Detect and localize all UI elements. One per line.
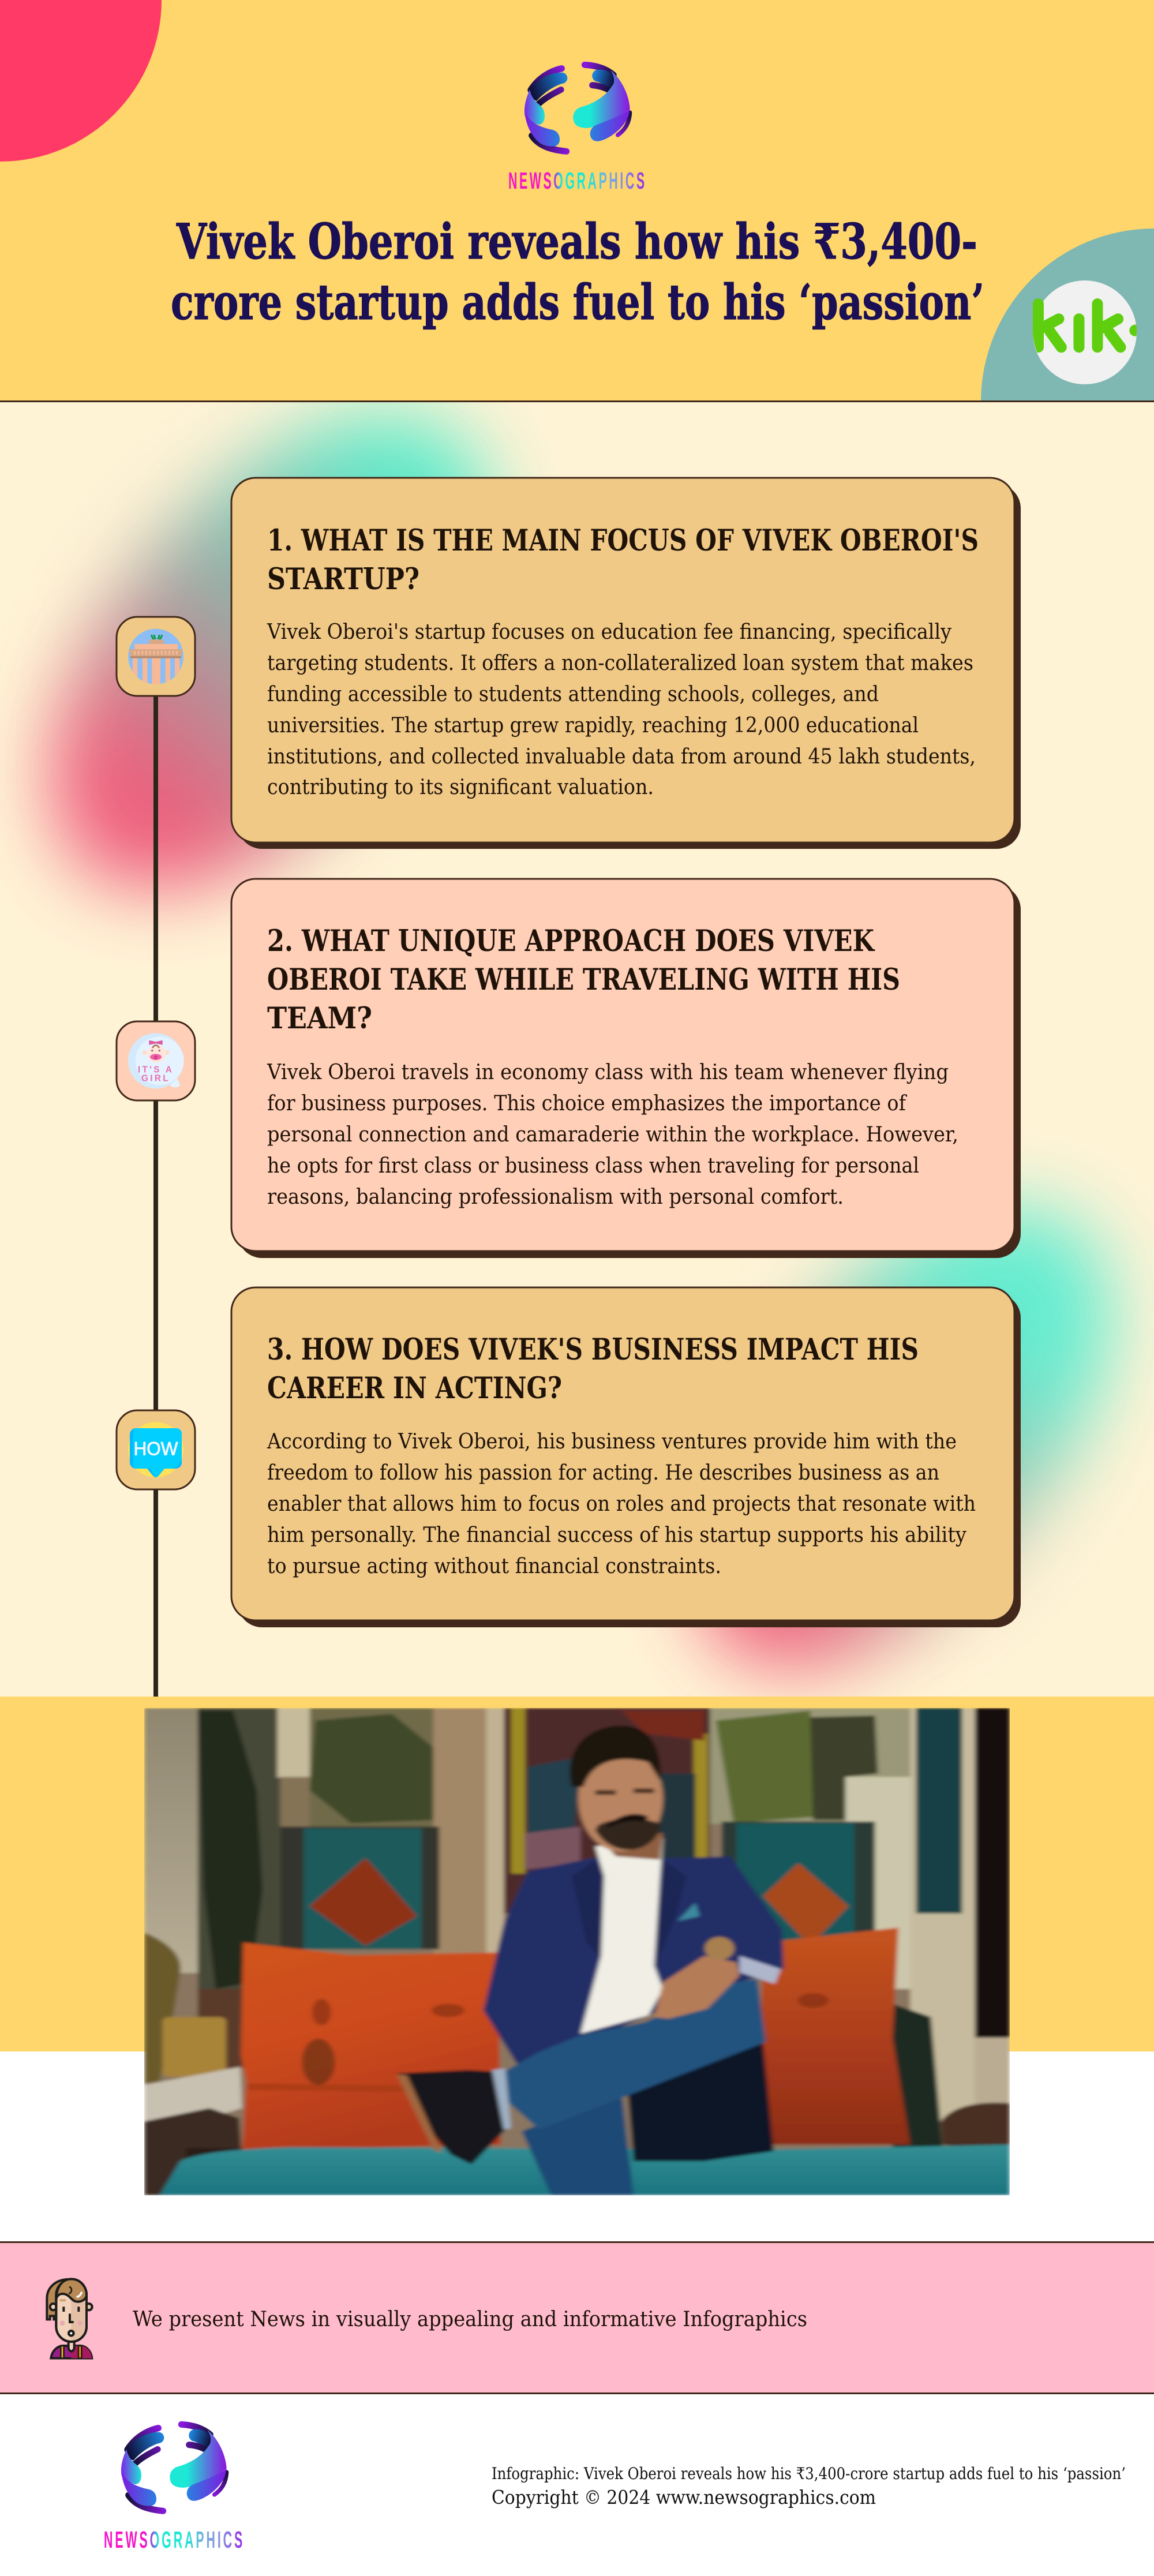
heading: question 1 xyxy=(267,523,979,597)
heading: question 2: TEAM? xyxy=(267,1001,372,1036)
decorative blurred blob: upper left xyxy=(0,336,574,968)
logo mark xyxy=(524,65,630,151)
icon: kik logo xyxy=(1033,280,1137,384)
sofa frame right xyxy=(893,2004,943,2148)
logo wordmark: NEWSOGRAPHICS xyxy=(508,167,645,194)
text: answer 2: personal connection and camaraderie within the workplace. However, xyxy=(267,1123,958,1147)
text: answer 1: institutions, and collected invaluable data from around 45 lakh students, xyxy=(267,745,976,769)
right chair xyxy=(722,1822,875,1944)
heading: question 3: CAREER IN ACTING? xyxy=(267,1371,562,1406)
header band xyxy=(0,0,1154,402)
text: footer credit: Copyright © 2024 www.newsographics.com xyxy=(492,2486,876,2508)
left side table with statue and basket xyxy=(198,1989,245,2068)
text: answer 3: to pursue acting without financial constraints. xyxy=(267,1555,721,1578)
heading: question 2 xyxy=(267,924,900,1036)
text: footer credit xyxy=(492,2464,1126,2508)
text: answer 1: universities. The startup grew rapidly, reaching 12,000 educational xyxy=(267,714,919,737)
timeline icon 2: it's a girl xyxy=(117,1021,195,1100)
heading: question 1: STARTUP? xyxy=(267,562,419,597)
timeline icon 1: monument xyxy=(117,617,195,696)
boot xyxy=(397,2070,507,2165)
sleeve end and wrist xyxy=(740,1956,781,1984)
timeline icon 2: it's a girl: IT'S A xyxy=(138,1065,174,1075)
teal seat xyxy=(160,2144,1010,2195)
hand xyxy=(654,1956,740,2019)
logo: newsographics top xyxy=(508,65,645,194)
timeline icon 2: it's a girl: GIRL xyxy=(141,1073,170,1083)
text: answer 1: contributing to its significant valuation. xyxy=(267,776,654,799)
text: answer 2: reasons, balancing professionalism with personal comfort. xyxy=(267,1185,844,1209)
photo: Vivek Oberoi seated on a sofa xyxy=(144,1708,1010,2195)
text: answer 3: freedom to follow his passion for acting. He describes business as an xyxy=(267,1461,939,1485)
timeline icon 3: how xyxy=(117,1410,195,1489)
logo wordmark: NEWSOGRAPHICS xyxy=(104,2526,242,2553)
text: answer 2: for business purposes. This choice emphasizes the importance of xyxy=(267,1092,907,1115)
header corner circle: teal xyxy=(981,229,1154,401)
panel: question 1 xyxy=(231,478,1021,849)
logo: newsographics footer xyxy=(104,2424,242,2553)
text: answer 2 xyxy=(267,1061,958,1209)
heading: question 2: OBEROI TAKE WHILE TRAVELING WITH HIS xyxy=(267,963,900,997)
text: answer 1: targeting students. It offers a non-collateralized loan system that makes xyxy=(267,652,973,675)
text: answer 3: him personally. The financial success of his startup supports his ability xyxy=(267,1523,967,1547)
text: answer 1 xyxy=(267,620,976,799)
heading: question 3 xyxy=(267,1332,919,1406)
hair xyxy=(570,1725,661,1787)
header corner circle: red xyxy=(0,0,162,162)
timeline icon 3: how: HOW xyxy=(134,1439,178,1459)
left cushion xyxy=(241,1942,501,2151)
text: answer 3: enabler that allows him to focus on roles and projects that resonate with xyxy=(267,1492,976,1516)
yellow band behind photo xyxy=(0,1697,1154,2051)
lower leg xyxy=(522,2092,634,2195)
thigh xyxy=(492,1979,766,2130)
heading: question 2: 2. WHAT UNIQUE APPROACH DOES VIVEK xyxy=(267,924,875,958)
text: answer 3 xyxy=(267,1430,976,1578)
right cushion xyxy=(757,1927,911,2144)
jacket xyxy=(484,1856,784,2072)
text: answer 2: Vivek Oberoi travels in economy class with his team whenever flying xyxy=(267,1061,949,1084)
logo mark xyxy=(121,2424,227,2511)
text: answer 1: funding accessible to students attending schools, colleges, and xyxy=(267,683,879,706)
shirt xyxy=(580,1838,663,2034)
watch xyxy=(705,1937,734,1960)
panel: question 3 xyxy=(231,1287,1021,1627)
heading: question 1: 1. WHAT IS THE MAIN FOCUS OF VIVEK OBEROI'S xyxy=(267,523,979,558)
panel: question 2 xyxy=(231,879,1021,1258)
banner: tagline strip xyxy=(0,2241,1154,2394)
decorative blurred blob: lower right xyxy=(616,1135,1154,1739)
text: answer 2: he opts for first class or business class when traveling for personal xyxy=(267,1154,919,1178)
title xyxy=(171,213,984,331)
icon: avatar xyxy=(47,2279,92,2358)
dark trousers shadow xyxy=(628,2042,774,2161)
heading: question 3: 3. HOW DOES VIVEK'S BUSINESS IMPACT HIS xyxy=(267,1332,919,1367)
main cream section xyxy=(0,402,1154,1697)
text: tagline: We present News in visually appealing and informative Infographics xyxy=(133,2308,807,2331)
neck and face xyxy=(595,1833,663,1860)
timeline line xyxy=(153,692,158,1697)
text: answer 1: Vivek Oberoi's startup focuses on education fee financing, specifically xyxy=(267,620,952,644)
title: Vivek Oberoi reveals how his ₹3,400- xyxy=(176,213,977,270)
text: answer 3: According to Vivek Oberoi, his business ventures provide him with the xyxy=(267,1430,957,1454)
left chair xyxy=(280,1826,439,1949)
